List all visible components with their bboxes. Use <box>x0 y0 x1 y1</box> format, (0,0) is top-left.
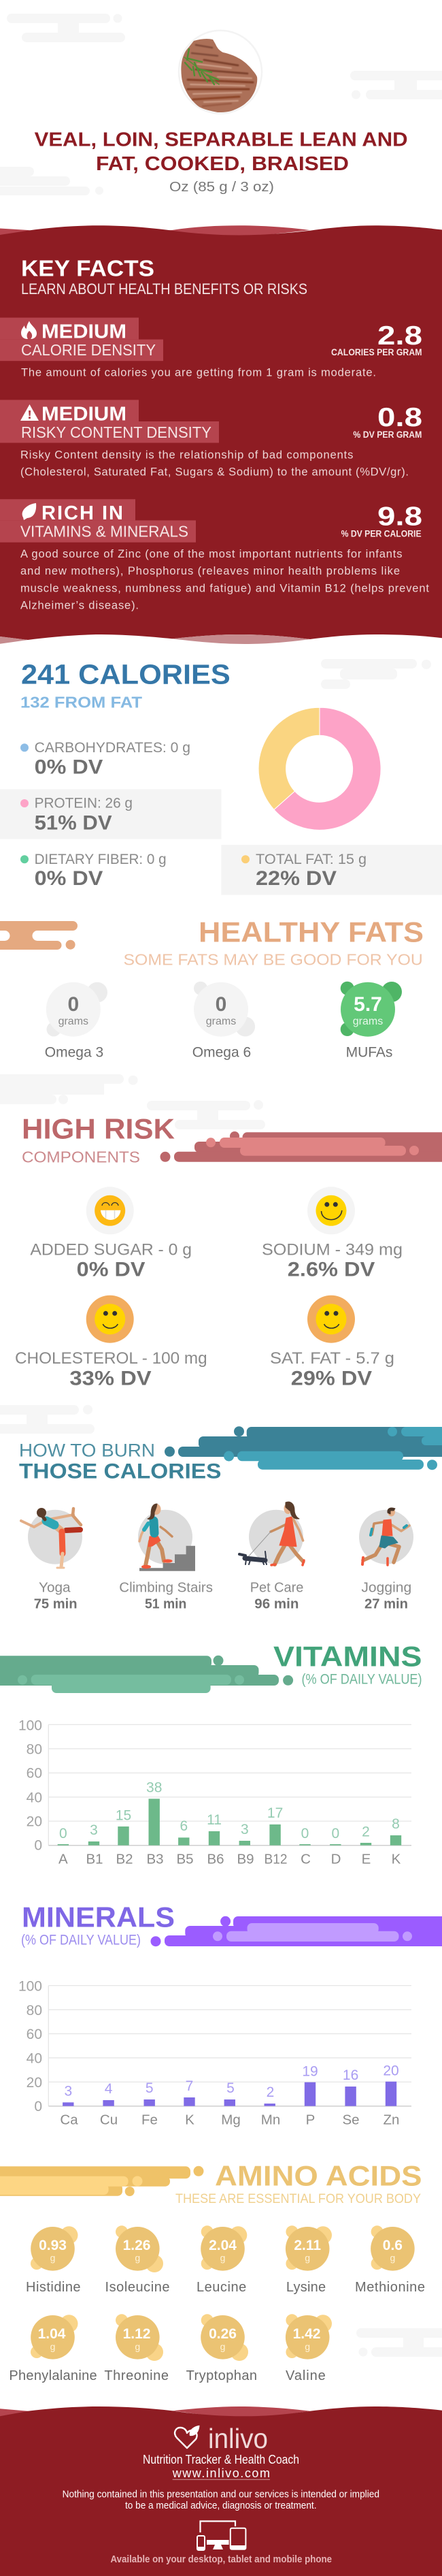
icon: rosemary sprig <box>184 49 219 84</box>
fact: rich in vitamins and minerals: VITAMINS & MINERALS <box>20 523 188 541</box>
heading: vitamins: (% OF DAILY VALUE) <box>302 1671 422 1687</box>
amino badge: leucine: Leucine <box>197 2280 246 2295</box>
fat badge: MUFAs: grams <box>353 1016 383 1027</box>
legend: dietary fiber: DIETARY FIBER: 0 g <box>35 852 167 867</box>
heading: how to burn those calories: THOSE CALORIES <box>19 1459 221 1483</box>
bar chart: vitamins: D <box>331 1851 341 1867</box>
amino badge: tryptophan: 0.26 <box>209 2326 237 2342</box>
calories heading: 241 CALORIES <box>21 658 231 690</box>
key facts heading <box>21 257 307 297</box>
bar chart: minerals: 20 <box>383 2063 399 2078</box>
bar chart: vitamins <box>18 1718 411 1867</box>
decorative bars: high risk <box>160 1131 442 1162</box>
bar chart: minerals: 16 <box>343 2067 358 2083</box>
amino badge: lysine: g <box>305 2253 310 2264</box>
heading: high risk components: HIGH RISK <box>22 1113 175 1145</box>
bar chart: vitamins: B2 <box>116 1851 133 1867</box>
risk item: cholesterol: CHOLESTEROL - 100 mg <box>15 1349 207 1368</box>
wave: lighter bottom band <box>0 634 310 644</box>
wave: lighter band <box>0 2406 310 2420</box>
risk item: sodium <box>262 1187 403 1281</box>
legend: protein <box>0 789 221 839</box>
icon: smiling face <box>95 1304 125 1334</box>
bar chart: minerals: K <box>185 2112 194 2128</box>
risk item: added sugar: 0% DV <box>77 1258 146 1281</box>
amino badge: methionine: Methionine <box>355 2280 425 2295</box>
fact: calorie density <box>0 318 422 379</box>
fact: rich in vitamins and minerals: 9.8 <box>377 502 422 532</box>
legend: dietary fiber: 0% DV <box>35 867 103 890</box>
bar chart: vitamins: 17 <box>267 1805 283 1821</box>
amino badge: histidine: Histidine <box>26 2280 81 2295</box>
fact: rich in vitamins and minerals: A good source of Zinc (one of the most important nutrients for infants <box>20 548 403 560</box>
bar chart: minerals: 20 <box>27 2075 42 2091</box>
logo: inlivo: inlivo <box>208 2423 268 2454</box>
amino badge: phenylalanine <box>9 2315 97 2383</box>
activity labels: Pet Care <box>250 1580 303 1595</box>
serving size: Oz (85 g / 3 oz) <box>169 180 274 195</box>
heading: healthy fats: HEALTHY FATS <box>199 916 424 948</box>
wave: dark background <box>0 225 442 640</box>
key facts heading: KEY FACTS <box>21 257 154 282</box>
bar chart: vitamins: 38 <box>146 1780 162 1795</box>
title: FAT, COOKED, BRAISED <box>96 153 349 175</box>
disclaimer: to be a medical advice, diagnosis or treatment. <box>125 2500 317 2511</box>
bar chart: minerals: 60 <box>27 2027 42 2042</box>
bar chart: vitamins: 80 <box>27 1742 42 1758</box>
amino badge: lysine: Lysine <box>286 2280 326 2295</box>
fact: rich in vitamins and minerals: muscle weakness, numbness and fatigue) and Vitamin B12 (helps prevent <box>20 582 429 594</box>
amino badge: isoleucine: Isoleucine <box>105 2280 170 2295</box>
activity: climbing stairs <box>138 1504 195 1571</box>
icon: walking figure with dog <box>239 1502 304 1565</box>
amino badge: leucine: 2.04 <box>209 2238 237 2253</box>
legend: protein: PROTEIN: 26 g <box>35 796 133 811</box>
bar chart: vitamins: 60 <box>27 1766 42 1782</box>
fact: calorie density: The amount of calories you are getting from 1 gram is moderate. <box>21 367 376 379</box>
amino badge: lysine <box>286 2225 332 2295</box>
bar chart: vitamins: B1 <box>86 1851 103 1867</box>
icon: flame <box>21 321 37 339</box>
icon: stairs <box>139 1546 195 1571</box>
bar chart: minerals: Ca <box>60 2112 78 2128</box>
bar chart: vitamins: 0 <box>34 1838 42 1854</box>
amino badge: methionine: 0.6 <box>383 2238 403 2253</box>
amino badge: histidine: g <box>50 2253 55 2264</box>
bar chart: minerals: Mn <box>261 2112 280 2128</box>
disclaimer: Nothing contained in this presentation and our services is intended or implied <box>63 2488 379 2500</box>
amino badge: valine <box>286 2314 332 2383</box>
bar chart: vitamins: 0 <box>59 1826 67 1841</box>
bar chart: vitamins: 15 <box>116 1807 131 1823</box>
decorative bars: vitamins <box>0 1656 293 1693</box>
fact: risky content density: 0.8 <box>377 403 422 432</box>
bar chart: minerals: 19 <box>302 2063 318 2079</box>
legend: carbohydrates: 0% DV <box>35 756 103 779</box>
fat badge: omega 6: grams <box>206 1016 236 1027</box>
disclaimer <box>63 2488 379 2511</box>
bar chart: vitamins: 6 <box>180 1818 188 1834</box>
amino badge: isoleucine: 1.26 <box>123 2238 150 2253</box>
decorative bars: how to burn <box>165 1426 442 1470</box>
bar chart: vitamins: 40 <box>27 1790 42 1805</box>
risk item: saturated fat <box>270 1295 394 1389</box>
bar chart: vitamins: 3 <box>241 1822 249 1837</box>
activity: pet care <box>239 1502 304 1565</box>
panel: key facts <box>0 225 442 644</box>
legend: dietary fiber <box>20 852 167 890</box>
fat badge: omega 3: 0 <box>67 993 79 1016</box>
fat badge: omega 3: Omega 3 <box>45 1045 103 1061</box>
amino badge: lysine: 2.11 <box>294 2238 321 2253</box>
activity labels: Climbing Stairs <box>119 1580 213 1595</box>
fact: rich in vitamins and minerals <box>0 499 429 611</box>
bar chart: vitamins: 8 <box>392 1816 400 1832</box>
fat badge: omega 3: grams <box>58 1016 88 1027</box>
decorative bars: minerals <box>151 1916 442 1946</box>
title <box>35 129 408 175</box>
fact: risky content density <box>0 400 422 478</box>
heading: vitamins: VITAMINS <box>273 1641 422 1673</box>
bar chart: minerals: Zn <box>384 2112 399 2128</box>
legend: total fat: TOTAL FAT: 15 g <box>256 852 367 867</box>
bar chart: vitamins: 3 <box>90 1822 98 1838</box>
bar chart: vitamins: 100 <box>18 1718 42 1734</box>
fact: calorie density: MEDIUM <box>41 321 126 343</box>
fact: calorie density: CALORIES PER GRAM <box>331 347 422 357</box>
amino badge: valine: 1.42 <box>293 2326 320 2342</box>
panel: footer <box>0 2406 442 2576</box>
fact: rich in vitamins and minerals: RICH IN <box>41 502 123 524</box>
fact: risky content density: MEDIUM <box>41 403 126 425</box>
bar chart: vitamins: A <box>58 1851 68 1867</box>
fat badge: omega 6: 0 <box>216 993 226 1016</box>
activity labels: 96 min <box>254 1596 299 1612</box>
amino badge: valine: Valine <box>286 2368 326 2383</box>
amino badge: isoleucine: g <box>135 2253 140 2264</box>
bar chart: vitamins: B9 <box>237 1851 254 1867</box>
risk item: cholesterol: 33% DV <box>69 1367 152 1389</box>
heading: high risk components <box>22 1113 175 1165</box>
bar chart: minerals: 2 <box>267 2084 274 2100</box>
amino badge: leucine <box>197 2225 247 2295</box>
bar chart: minerals: 40 <box>27 2051 42 2067</box>
amino badge: threonine: g <box>135 2341 140 2352</box>
heading: amino acids: AMINO ACIDS <box>215 2160 422 2192</box>
bar chart: vitamins: B5 <box>176 1851 194 1867</box>
bar chart: vitamins: 2 <box>362 1824 370 1839</box>
bar chart: minerals: 5 <box>226 2080 235 2096</box>
amino badge: tryptophan: g <box>220 2341 225 2352</box>
calories heading <box>20 658 231 711</box>
calories heading: 132 FROM FAT <box>20 693 143 711</box>
risk item: cholesterol <box>15 1295 207 1389</box>
amino badge: phenylalanine: Phenylalanine <box>9 2368 97 2383</box>
bar chart: minerals: 100 <box>18 1978 42 1994</box>
heading: amino acids <box>175 2160 422 2206</box>
heading: healthy fats: SOME FATS MAY BE GOOD FOR YOU <box>124 950 423 968</box>
key facts heading: LEARN ABOUT HEALTH BENEFITS OR RISKS <box>21 280 307 297</box>
fact: risky content density: % DV PER GRAM <box>353 430 422 440</box>
activity labels: 51 min <box>145 1596 186 1612</box>
heading: vitamins <box>273 1641 422 1687</box>
logo: inlivo <box>175 2423 268 2454</box>
icon: jogging figure <box>362 1507 409 1565</box>
wave: dark background <box>0 2406 442 2576</box>
activity: jogging <box>359 1507 413 1565</box>
activity labels: 27 min <box>364 1596 408 1612</box>
heading: high risk components: COMPONENTS <box>22 1148 140 1165</box>
heading: minerals: MINERALS <box>22 1901 175 1933</box>
heading: amino acids: THESE ARE ESSENTIAL FOR YOUR BODY <box>175 2192 421 2206</box>
bar chart: minerals: 80 <box>27 2003 42 2018</box>
amino badge: threonine <box>104 2314 169 2383</box>
decorative bars: healthy fats <box>0 921 78 950</box>
risk item: saturated fat: SAT. FAT - 5.7 g <box>270 1349 394 1368</box>
amino badge: histidine <box>26 2226 81 2295</box>
fat badge: omega 6 <box>192 982 255 1061</box>
amino badge: methionine: g <box>390 2253 395 2264</box>
title: VEAL, LOIN, SEPARABLE LEAN AND <box>35 129 408 150</box>
icon: warning triangle <box>20 404 39 421</box>
fact: calorie density: 2.8 <box>377 321 422 351</box>
heading: how to burn those calories: HOW TO BURN <box>19 1440 155 1460</box>
decorative bars: amino acids <box>0 2166 204 2196</box>
legend: protein: 51% DV <box>35 811 112 834</box>
activity labels <box>34 1580 411 1612</box>
risk item: sodium: 2.6% DV <box>288 1258 375 1281</box>
bar chart: vitamins: 0 <box>301 1826 309 1841</box>
donut chart: macronutrients <box>258 707 381 830</box>
bar chart: vitamins: E <box>362 1851 371 1867</box>
heading: minerals: (% OF DAILY VALUE) <box>21 1933 141 1948</box>
bar chart: vitamins: 11 <box>207 1812 222 1828</box>
icon: smiling face <box>316 1195 347 1226</box>
icon: climbing figure <box>139 1504 173 1568</box>
bar chart: vitamins: B12 <box>264 1851 287 1867</box>
amino badge: histidine: 0.93 <box>39 2238 67 2253</box>
fact: rich in vitamins and minerals: % DV PER CALORIE <box>341 529 422 539</box>
bar chart: minerals: Mg <box>221 2112 241 2128</box>
legend: carbohydrates <box>20 740 190 779</box>
fact: risky content density: (Cholesterol, Saturated Fat, Sugars & Sodium) to the amount (%DV/gr). <box>20 466 409 478</box>
bar chart: minerals: Cu <box>100 2112 118 2128</box>
wave: lighter top band <box>0 225 310 242</box>
icon: grinning face <box>95 1195 125 1226</box>
amino badge: tryptophan <box>186 2314 257 2383</box>
legend: carbohydrates: CARBOHYDRATES: 0 g <box>35 740 190 756</box>
header: food image <box>179 31 262 114</box>
bar chart: minerals: 3 <box>64 2083 72 2099</box>
heading: how to burn those calories <box>19 1440 221 1483</box>
icon: smiling face <box>316 1304 347 1334</box>
bar chart: minerals: P <box>306 2112 315 2128</box>
bar chart: minerals <box>18 1978 411 2128</box>
bar chart: vitamins: K <box>392 1851 401 1867</box>
amino badge: phenylalanine: g <box>50 2341 55 2352</box>
amino badge: threonine: 1.12 <box>123 2326 150 2342</box>
fat badge: MUFAs: MUFAs <box>346 1045 392 1061</box>
activity labels: Jogging <box>361 1580 411 1595</box>
heading: healthy fats <box>124 916 424 968</box>
risk item: sodium: SODIUM - 349 mg <box>262 1240 403 1259</box>
fat badge: omega 3 <box>45 982 107 1061</box>
bar chart: minerals: Fe <box>141 2112 158 2128</box>
website link: www.inlivo.com <box>172 2466 270 2480</box>
activity labels: 75 min <box>34 1596 78 1612</box>
fat badge: omega 6: Omega 6 <box>192 1045 251 1061</box>
icon: steak <box>181 39 257 112</box>
amino badge: threonine: Threonine <box>104 2368 169 2383</box>
fat badge: MUFAs: 5.7 <box>354 993 382 1016</box>
steak grill marks <box>188 45 253 106</box>
fat badge: MUFAs <box>341 982 402 1061</box>
bar chart: minerals: 5 <box>146 2080 154 2096</box>
amino badge: leucine: g <box>220 2253 225 2264</box>
activity labels: Yoga <box>39 1580 71 1595</box>
fact: calorie density: CALORIE DENSITY <box>21 341 156 359</box>
amino badge: methionine <box>355 2225 425 2295</box>
activity: yoga <box>21 1508 82 1568</box>
icon: devices <box>197 2522 245 2550</box>
fact: risky content density: Risky Content density is the relationship of bad components <box>20 449 353 462</box>
bar chart: vitamins: 20 <box>27 1814 42 1830</box>
bar chart: minerals: 0 <box>34 2099 42 2114</box>
amino badge: tryptophan: Tryptophan <box>186 2368 257 2383</box>
fact: risky content density: RISKY CONTENT DENSITY <box>21 423 211 441</box>
bar chart: vitamins: B6 <box>207 1851 224 1867</box>
bar chart: minerals: 4 <box>105 2081 113 2097</box>
fact: rich in vitamins and minerals: Alzheimer’s disease). <box>20 599 139 611</box>
amino badge: valine: g <box>305 2341 310 2352</box>
bar chart: vitamins: 0 <box>331 1826 339 1841</box>
icon: leaf <box>22 503 36 520</box>
risk item: added sugar: ADDED SUGAR - 0 g <box>30 1240 192 1259</box>
tagline: Nutrition Tracker & Health Coach <box>143 2453 299 2466</box>
bar chart: vitamins: C <box>301 1851 311 1867</box>
legend: total fat <box>221 845 442 895</box>
amino badge: phenylalanine: 1.04 <box>38 2326 66 2342</box>
risk item: added sugar <box>30 1187 192 1281</box>
risk item: saturated fat: 29% DV <box>291 1367 372 1389</box>
legend: total fat: 22% DV <box>256 867 337 890</box>
icon: yoga figure <box>21 1508 81 1568</box>
bar chart: minerals: 7 <box>186 2078 193 2094</box>
heading: minerals <box>21 1901 175 1948</box>
availability note: Available on your desktop, tablet and mobile phone <box>110 2554 332 2565</box>
bar chart: minerals: Se <box>342 2112 360 2128</box>
amino badge: isoleucine <box>105 2225 170 2295</box>
bar chart: vitamins: B3 <box>146 1851 164 1867</box>
fact: rich in vitamins and minerals: and new mothers), Phosphorus (releaves minor health problems like <box>20 565 400 577</box>
